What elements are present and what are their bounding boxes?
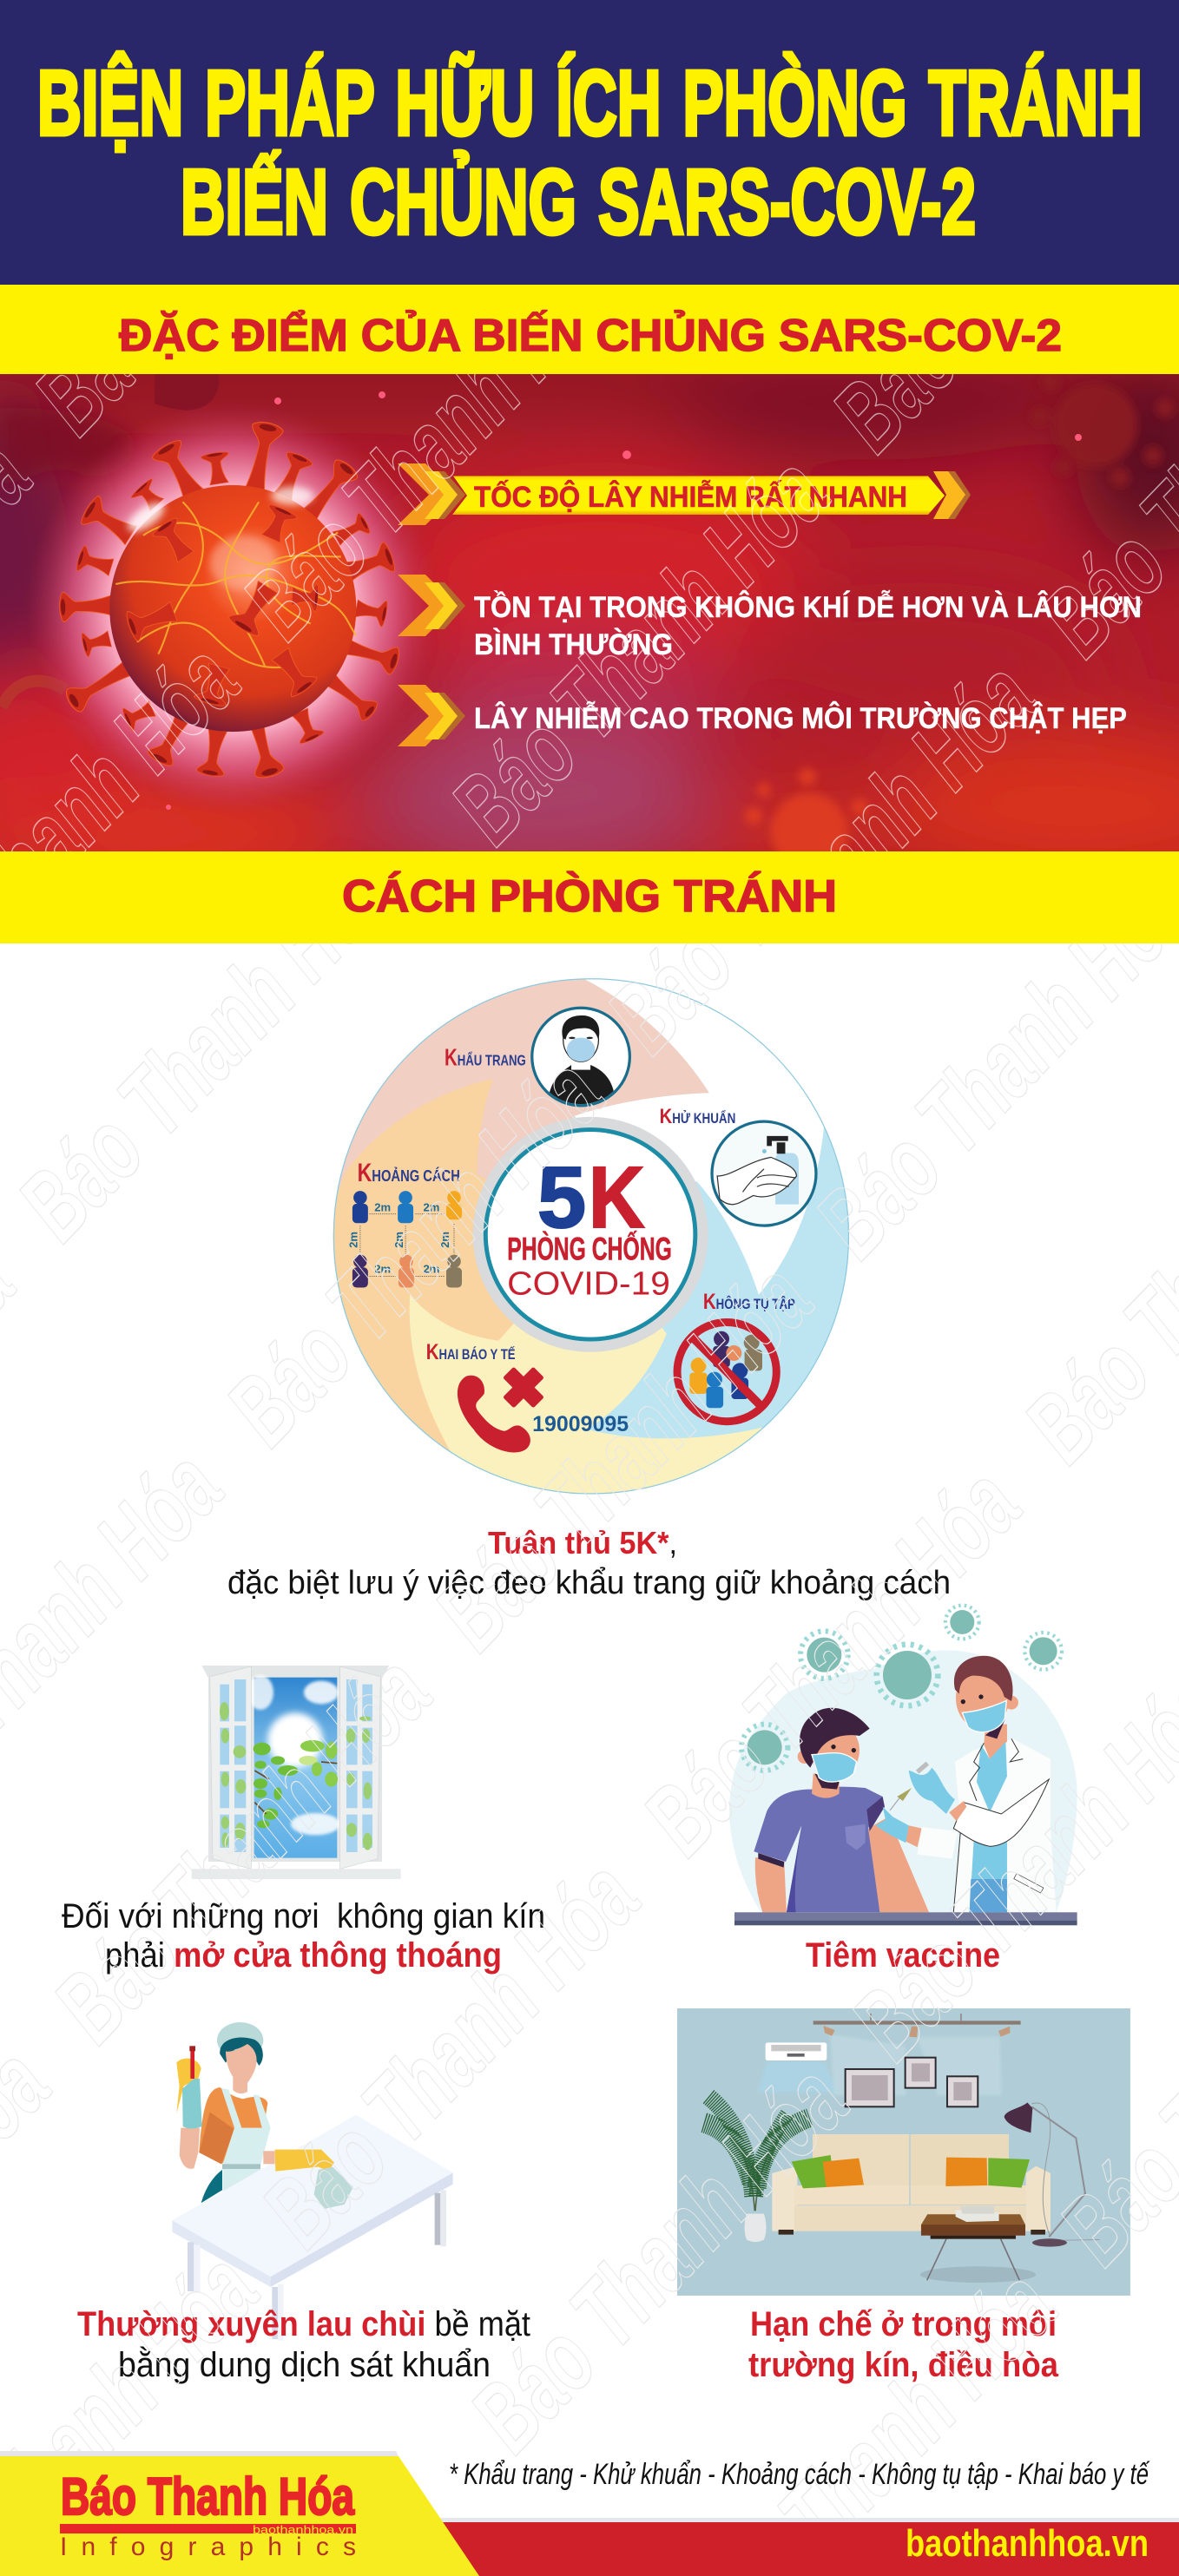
patient <box>754 1708 929 1912</box>
background blob top left <box>0 408 135 486</box>
wall frames <box>846 2058 978 2106</box>
title <box>37 52 1143 253</box>
icon: hand sanitizer <box>712 1121 816 1226</box>
lower arm <box>906 1825 922 1847</box>
item 3: confined spaces: LÂY NHIỄM CAO TRONG MÔI TRƯỜNG CHẬT HẸP <box>474 701 1127 735</box>
background tube left <box>2 681 65 707</box>
illustration: vaccination <box>729 1606 1077 1925</box>
watermark over red panel <box>0 374 1179 851</box>
coffee table <box>920 2206 1036 2283</box>
patient-side glove <box>875 1807 909 1843</box>
doctor <box>890 1656 1057 1912</box>
icon: six people 2m apart: 2m <box>424 1262 439 1275</box>
footer: yellow logo block: Infographics <box>60 2533 356 2561</box>
item 3: confined spaces <box>398 685 1127 746</box>
5K wheel diagram <box>321 969 849 1500</box>
caption: wipe surfaces: bằng dung dịch sát khuẩn <box>118 2345 491 2384</box>
outer frame <box>201 1666 389 1862</box>
label: no gathering: KHÔNG TỤ TẬP <box>703 1290 795 1314</box>
item 1: infection speed: TỐC ĐỘ LÂY NHIỄM RẤT NHANH <box>474 480 907 514</box>
icon: six people 2m apart: 2m <box>374 1200 391 1213</box>
sofa <box>772 2134 1051 2235</box>
caption: open windows: Đối với những nơi không gian kín <box>62 1897 545 1935</box>
watermark over white area: Báo Thanh Hóa <box>0 832 416 1260</box>
section band: characteristics heading: ĐẶC ĐIỂM CỦA BIẾN CHỦNG SARS-COV-2 <box>119 310 1062 361</box>
leaves left <box>254 1743 298 1828</box>
sector: yellow medical declaration <box>410 1295 762 1493</box>
caption: follow 5K: Tuân thủ 5K*, <box>488 1525 677 1561</box>
illustration: closed room with AC <box>677 2008 1130 2296</box>
sector: white disinfect <box>562 969 824 1295</box>
hotline number: 19009095 <box>532 1412 629 1436</box>
footer: yellow logo block: baothanhhoa.vn <box>253 2523 353 2536</box>
footer: yellow logo block <box>0 2451 479 2576</box>
caption: open windows <box>62 1897 545 1975</box>
watermark over red panel: Báo Thanh Hóa <box>430 436 849 864</box>
footer: red band with website <box>434 2518 1179 2576</box>
icon: no gathering <box>677 1323 776 1422</box>
header banner <box>0 0 1179 285</box>
left sash <box>210 1666 251 1869</box>
caption: open windows: phải mở cửa thông thoáng <box>105 1936 502 1975</box>
item 1: infection speed <box>398 463 971 525</box>
woman <box>176 2022 271 2203</box>
icon: six people 2m apart: 2m <box>392 1232 405 1248</box>
label: medical declaration: KHAI BÁO Y TẾ <box>426 1340 516 1364</box>
sector: orange distancing <box>333 1078 514 1451</box>
centre badge <box>473 1117 708 1352</box>
item 2: survives longer in air: BÌNH THƯỜNG <box>474 628 673 661</box>
watermark over white area: Báo Thanh Hóa <box>205 1037 624 1465</box>
doctor sleeve <box>953 1779 1049 1846</box>
centre badge: PHÒNG CHỐNG <box>507 1231 672 1267</box>
table <box>172 2115 453 2277</box>
centre badge: 5 <box>537 1150 586 1246</box>
right sash <box>340 1666 380 1869</box>
caption: wipe surfaces: Thường xuyên lau chùi bề mặt <box>77 2305 530 2343</box>
air conditioner <box>758 2042 836 2093</box>
leaves right <box>299 1740 338 1787</box>
label: disinfect: KHỬ KHUẨN <box>660 1105 735 1128</box>
label: mask: KHẨU TRANG <box>445 1044 526 1071</box>
icon: six people 2m apart: 2m <box>374 1262 391 1275</box>
illustration: cleaning woman <box>172 2022 453 2341</box>
caption: avoid closed air-conditioned rooms <box>748 2305 1059 2384</box>
vase <box>744 2214 766 2242</box>
caption: vaccine: Tiêm vaccine <box>806 1936 1000 1975</box>
illustration: open window <box>192 1666 401 1879</box>
icon: man with mask <box>532 1008 629 1111</box>
icon: six people 2m apart: 2m <box>438 1232 451 1248</box>
watermark over red panel: Báo Thanh Hóa <box>221 231 641 659</box>
watermark over white area <box>0 943 1179 2553</box>
icon: six people 2m apart: 2m <box>424 1200 439 1213</box>
icon: six people 2m apart <box>347 1191 462 1288</box>
section band: prevention heading: CÁCH PHÒNG TRÁNH <box>342 871 837 922</box>
gloved hand and cloth <box>263 2150 353 2209</box>
syringe hand <box>909 1768 955 1814</box>
item 2: survives longer in air <box>398 575 1142 661</box>
virus illustration <box>26 402 440 816</box>
watermark over white area: Báo Thanh Hóa <box>449 2044 868 2472</box>
caption: avoid closed air-conditioned rooms: trường kín, điều hòa <box>748 2346 1059 2384</box>
watermark over white area: Báo Thanh Hóa <box>240 1839 660 2267</box>
background virus bottom <box>743 766 869 851</box>
caption: avoid closed air-conditioned rooms: Hạn chế ở trong môi <box>750 2305 1057 2343</box>
caption: follow 5K: đặc biệt lưu ý việc đeo khẩu trang giữ khoảng cách <box>227 1565 951 1601</box>
watermark over white area: Báo Thanh Hóa <box>32 1634 451 2062</box>
panel: virus characteristics <box>0 374 1179 851</box>
background blob top <box>155 374 219 411</box>
centre badge: COVID-19 <box>507 1265 670 1302</box>
watermark over white area: Báo Thanh Hóa <box>586 645 1005 1073</box>
sky <box>254 1678 337 1858</box>
watermark over white area: Báo Thanh Hóa <box>413 1242 833 1670</box>
plant <box>704 2097 810 2211</box>
sector: pink mask <box>338 979 708 1193</box>
caption: wipe surfaces <box>77 2305 530 2384</box>
centre badge: K <box>589 1150 645 1246</box>
icon: six people 2m apart: 2m <box>347 1232 360 1248</box>
table <box>734 1912 1077 1921</box>
backdrop <box>729 1651 1077 1912</box>
viruses <box>741 1606 1062 1771</box>
section band: characteristics heading <box>0 285 1179 374</box>
window sill <box>192 1869 401 1879</box>
ceiling lights <box>813 2014 1021 2095</box>
sparkles <box>166 391 1082 810</box>
icon: phone and cross <box>458 1367 544 1452</box>
floor lamp <box>1004 2102 1100 2247</box>
section band: prevention heading <box>0 851 1179 943</box>
footer: yellow logo block: Báo Thanh Hóa <box>61 2468 354 2526</box>
background virus top right <box>1045 380 1176 488</box>
label: distance: KHOẢNG CÁCH <box>358 1159 460 1187</box>
caption: follow 5K <box>227 1525 951 1601</box>
